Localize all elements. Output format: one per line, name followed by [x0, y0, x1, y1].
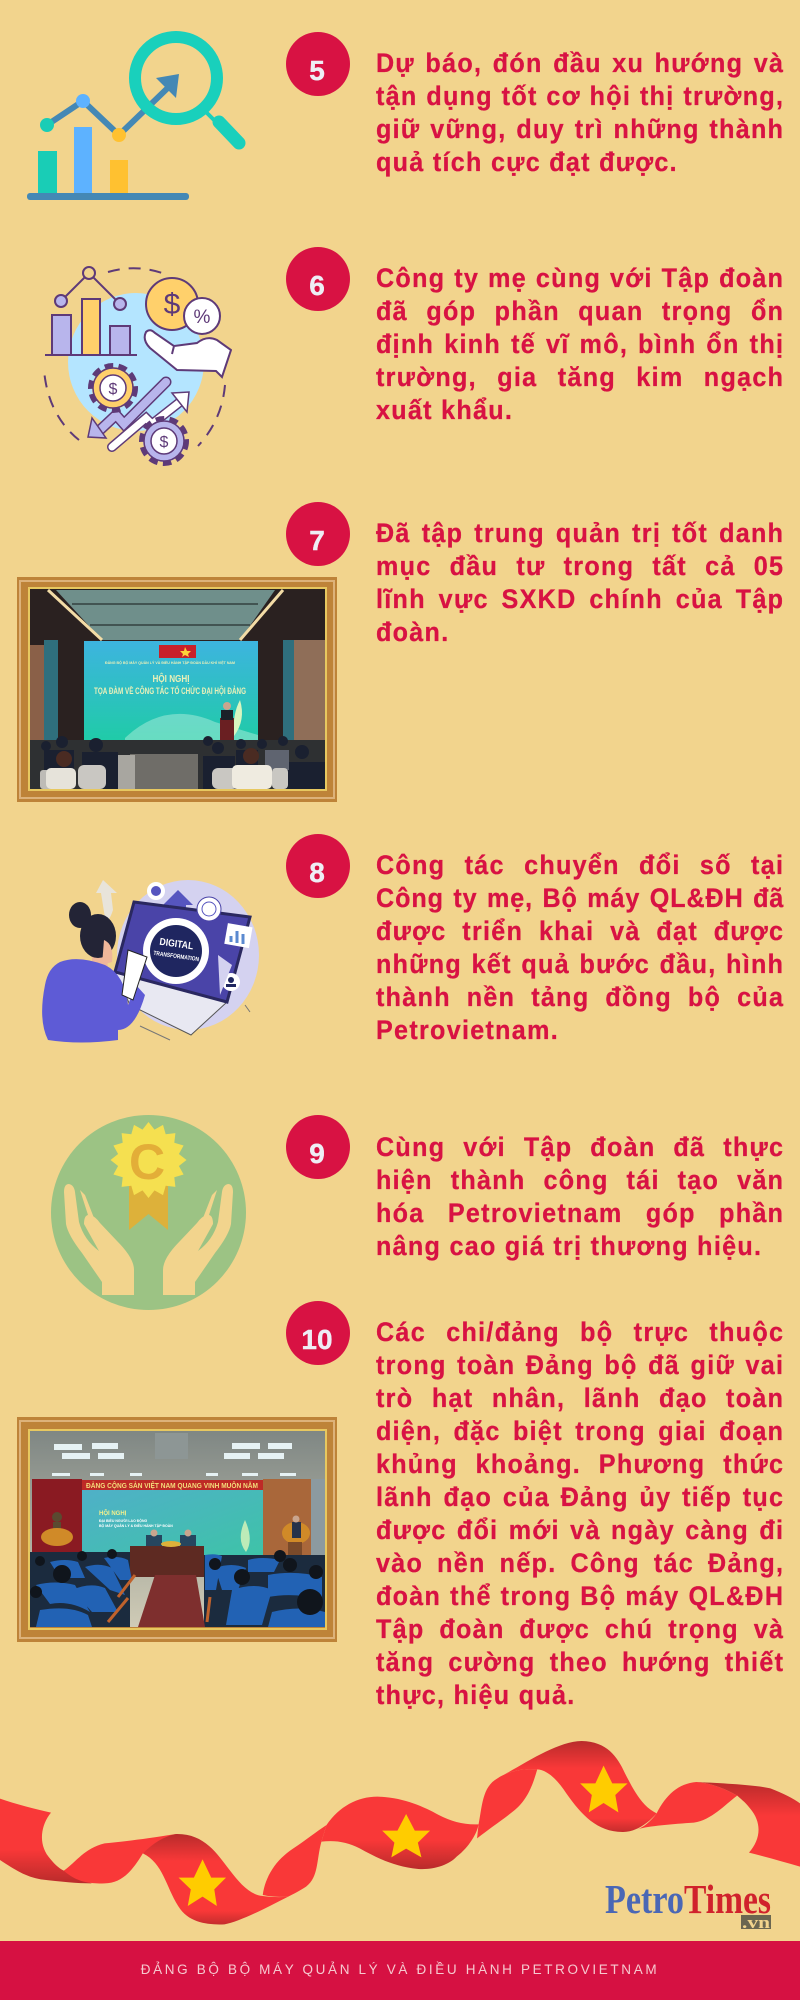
text block 10: tăng cường theo hướng thiết: [376, 1647, 784, 1677]
photo: meeting room in wooden frame: BỘ MÁY QUẢN LÝ & ĐIỀU HÀNH TẬP ĐOÀN: [99, 1523, 173, 1528]
text block 6: Công ty mẹ cùng với Tập đoàn: [376, 263, 784, 293]
text block 8: những kết quả bước đầu, hình: [376, 949, 784, 979]
icon: hands holding certificate medal: C: [129, 1134, 165, 1190]
text block 7: mục đầu tư trong tất cả 05: [376, 551, 784, 581]
text block 9: [376, 1132, 784, 1261]
text block 9: Cùng với Tập đoàn đã thực: [376, 1132, 784, 1162]
number badge 6: 6: [309, 270, 325, 301]
text block 10: Các chi/đảng bộ trực thuộc: [376, 1317, 784, 1347]
text block 10: [376, 1317, 784, 1710]
text block 10: trò hạt nhân, lãnh đạo toàn: [376, 1383, 784, 1413]
text block 5: giữ vững, duy trì những thành: [376, 114, 784, 144]
text block 6: [376, 263, 784, 425]
text block 5: quả tích cực đạt được.: [376, 147, 677, 177]
icon: finance hand and gears: [44, 266, 232, 466]
photo: meeting room in wooden frame: [17, 1417, 337, 1642]
text block 7: Đã tập trung quản trị tốt danh: [376, 518, 784, 548]
text block 10: lãnh đạo của Đảng ủy tiếp tục: [376, 1482, 784, 1512]
number badge 7: [286, 502, 350, 566]
photo: conference hall in wooden frame: TỌA ĐÀM VỀ CÔNG TÁC TỔ CHỨC ĐẠI HỘI ĐẢNG: [94, 685, 246, 696]
text block 7: đoàn.: [376, 617, 449, 647]
text block 8: Petrovietnam.: [376, 1015, 558, 1045]
icon: digital transformation illustration: [42, 880, 259, 1042]
text block 5: Dự báo, đón đầu xu hướng và: [376, 48, 784, 78]
icon: digital transformation illustration: DIGITAL: [159, 937, 194, 952]
number badge 9: 9: [309, 1138, 325, 1169]
number badge 7: 7: [309, 525, 325, 556]
icon: finance hand and gears: $: [160, 434, 169, 451]
text block 9: hiện thành công tái tạo văn: [376, 1165, 784, 1195]
photo: meeting room in wooden frame: ĐẠI BIỂU NGƯỜI LAO ĐỘNG: [99, 1518, 148, 1523]
text block 5: tận dụng tốt cơ hội thị trường,: [376, 81, 784, 111]
photo: conference hall in wooden frame: HỘI NGHỊ: [152, 672, 190, 685]
text block 10: khủng khoảng. Phương thức: [376, 1449, 784, 1479]
icon: digital transformation illustration: TRANSFORMATION: [153, 951, 199, 963]
text block 6: đã góp phần quan trọng ổn: [376, 296, 784, 326]
number badge 9: [286, 1115, 350, 1179]
footer text: ĐẢNG BỘ BỘ MÁY QUẢN LÝ VÀ ĐIỀU HÀNH PETROVIETNAM: [141, 1962, 659, 1977]
icon: finance hand and gears: %: [194, 307, 211, 328]
text block 6: xuất khẩu.: [376, 395, 513, 425]
icon: chart with magnifier: [27, 31, 246, 200]
text block 10: thực, hiệu quả.: [376, 1680, 575, 1710]
text block 8: thành nền tảng đồng bộ của: [376, 982, 784, 1012]
icon: finance hand and gears: $: [164, 288, 181, 321]
photo: conference hall in wooden frame: [17, 577, 337, 802]
photo: meeting room in wooden frame: HỘI NGHỊ: [99, 1509, 127, 1517]
logo: PetroTimes.vn: [605, 1880, 771, 1932]
number badge 6: [286, 247, 350, 311]
number badge 5: 5: [309, 55, 325, 86]
text block 8: Công tác chuyển đổi số tại: [376, 850, 784, 880]
text block 10: đoàn thể trong Bộ máy QL&ĐH: [376, 1581, 784, 1611]
footer band: [0, 1941, 800, 2000]
number badge 5: [286, 32, 350, 96]
text block 9: nâng cao giá trị thương hiệu.: [376, 1231, 762, 1261]
text block 7: [376, 518, 784, 647]
icon: hands holding certificate medal: [51, 1115, 246, 1310]
text block 5: [376, 48, 784, 177]
number badge 10: 10: [301, 1324, 333, 1355]
number badge 10: [286, 1301, 350, 1365]
text block 8: Công ty mẹ, Bộ máy QL&ĐH đã: [376, 883, 784, 913]
icon: finance hand and gears: $: [109, 381, 118, 398]
number badge 8: 8: [309, 857, 325, 888]
text block 9: hóa Petrovietnam góp phần: [376, 1198, 784, 1228]
text block 8: [376, 850, 784, 1045]
photo: meeting room in wooden frame: ĐẢNG CỘNG SẢN VIỆT NAM QUANG VINH MUÔN NĂM: [86, 1481, 258, 1490]
text block 8: được triển khai và đạt được: [376, 916, 784, 946]
flag ribbon with stars: [0, 1741, 800, 1924]
logo: PetroTimes.vn: .vn: [742, 1913, 771, 1932]
text block 10: diện, đặc biệt trong giai đoạn: [376, 1416, 784, 1446]
text block 6: trường, gia tăng kim ngạch: [376, 362, 784, 392]
photo: conference hall in wooden frame: ĐẢNG BỘ BỘ MÁY QUẢN LÝ VÀ ĐIỀU HÀNH TẬP ĐOÀN DẦU KHÍ VIỆT NAM: [105, 660, 235, 665]
text block 10: Tập đoàn được chú trọng và: [376, 1614, 784, 1644]
text block 6: định kinh tế vĩ mô, bình ổn thị: [376, 329, 784, 359]
number badge 8: [286, 834, 350, 898]
text block 10: vào nền nếp. Công tác Đảng,: [376, 1548, 784, 1578]
text block 10: được đổi mới và ngày càng đi: [376, 1515, 784, 1545]
text block 7: lĩnh vực SXKD chính của Tập: [376, 584, 784, 614]
text block 10: trong toàn Đảng bộ đã giữ vai: [376, 1350, 784, 1380]
